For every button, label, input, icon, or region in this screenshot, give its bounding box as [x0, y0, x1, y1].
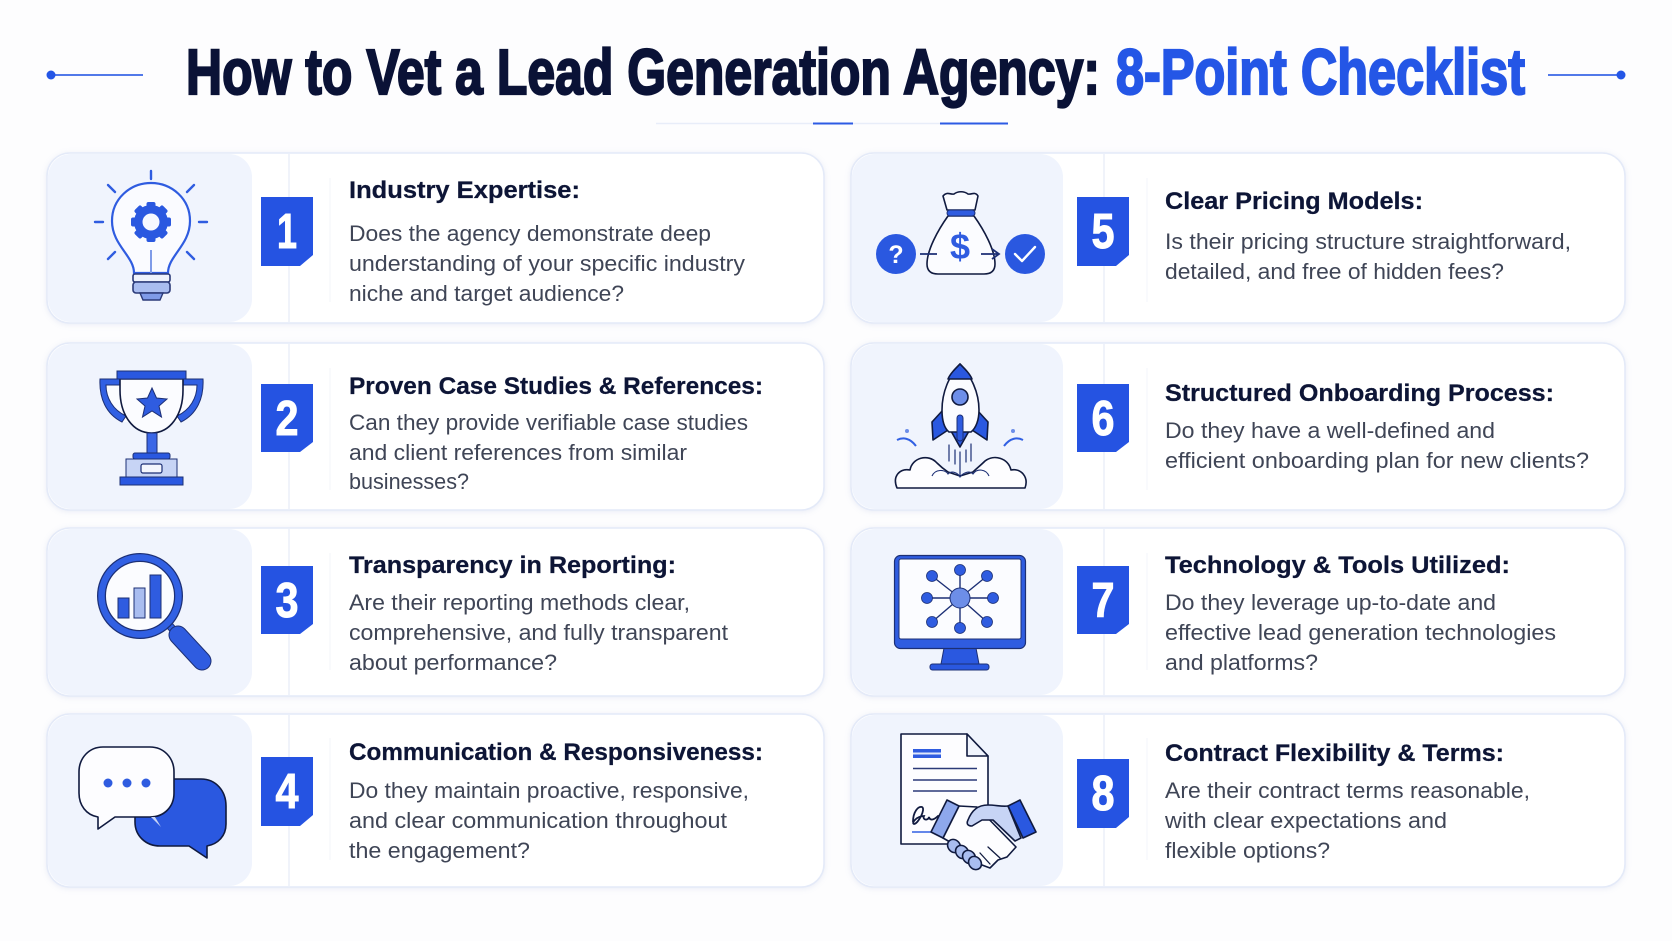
card 2: Proven Case Studies & References	[47, 343, 824, 510]
card 3 text: comprehensive, and fully transparent	[349, 620, 729, 645]
card 7 text	[1165, 552, 1556, 675]
number badge 4: 4	[276, 765, 298, 819]
card 6 text: efficient onboarding plan for new clients?	[1165, 448, 1589, 473]
header ornament: right line with dot	[1548, 70, 1626, 80]
card 3 text: Are their reporting methods clear,	[349, 590, 690, 615]
card 3 text: Transparency in Reporting:	[349, 552, 676, 579]
number badge 2: 2	[276, 392, 298, 446]
icon: money bag with question and check: $	[950, 226, 970, 267]
card 1 text: niche and target audience?	[349, 281, 624, 306]
number badge 7: 7	[1092, 574, 1114, 628]
header ornament: left line with dot	[46, 70, 143, 80]
card 5: Clear Pricing Models	[851, 153, 1625, 323]
card 4 text: Communication & Responsiveness:	[349, 739, 763, 766]
card 2 text: Can they provide verifiable case studies	[349, 410, 748, 435]
card 5 text: Clear Pricing Models:	[1165, 188, 1423, 215]
card 2 text: Proven Case Studies & References:	[349, 373, 763, 400]
card 2 text: and client references from similar	[349, 440, 688, 465]
title underline	[656, 122, 1008, 124]
number badge 6: 6	[1092, 392, 1114, 446]
icon: money bag with question and check: ?	[888, 241, 904, 269]
title: 8-Point Checklist	[1116, 36, 1525, 108]
card 7 text: Do they leverage up-to-date and	[1165, 590, 1496, 615]
number badge 1: 1	[277, 205, 297, 259]
card 6 text: Do they have a well-defined and	[1165, 418, 1495, 443]
icon: money bag with question and check	[876, 192, 1045, 274]
card 2 text	[349, 373, 763, 494]
card 4 text: and clear communication throughout	[349, 808, 728, 833]
card 7 text: effective lead generation technologies	[1165, 620, 1556, 645]
card 4 text: Do they maintain proactive, responsive,	[349, 778, 749, 803]
card 8 text: Contract Flexibility & Terms:	[1165, 740, 1504, 767]
card 8 text: Are their contract terms reasonable,	[1165, 778, 1530, 803]
icon: rocket launching from clouds	[895, 364, 1026, 488]
icon: chat bubbles	[79, 747, 226, 858]
card 6 text	[1165, 380, 1589, 473]
number badge 6	[1077, 384, 1129, 452]
card 8 text: flexible options?	[1165, 838, 1330, 863]
number badge 4	[261, 757, 313, 826]
number badge 8: 8	[1092, 767, 1114, 821]
card 7: Technology & Tools Utilized	[851, 528, 1625, 696]
number badge 7	[1077, 566, 1129, 634]
card 4 text: the engagement?	[349, 838, 530, 863]
number badge 3: 3	[276, 574, 298, 628]
card 5 text: Is their pricing structure straightforward,	[1165, 229, 1571, 254]
card 1 text: Does the agency demonstrate deep	[349, 221, 711, 246]
title: How to Vet a Lead Generation Agency:	[186, 36, 1100, 108]
card 4: Communication & Responsiveness	[47, 714, 824, 887]
card 8 text	[1164, 740, 1530, 863]
card 1 text: understanding of your specific industry	[349, 251, 746, 276]
card 7 text: Technology & Tools Utilized:	[1165, 552, 1510, 579]
icon: light bulb with gear	[95, 171, 207, 300]
card 3 text	[349, 552, 729, 675]
card 1 text: Industry Expertise:	[349, 177, 580, 204]
card 6 text: Structured Onboarding Process:	[1165, 380, 1554, 407]
card 1: Industry Expertise	[47, 153, 824, 323]
card 1 text	[349, 177, 746, 306]
card 3: Transparency in Reporting	[47, 528, 824, 696]
card 5 text: detailed, and free of hidden fees?	[1165, 259, 1504, 284]
card 2 text: businesses?	[349, 469, 469, 494]
card 8 text: with clear expectations and	[1164, 808, 1447, 833]
number badge 3	[261, 566, 313, 634]
card 3 text: about performance?	[349, 650, 557, 675]
icon: magnifying glass with bar chart	[102, 558, 202, 661]
icon: monitor with network hub	[894, 556, 1026, 670]
card 7 text: and platforms?	[1165, 650, 1318, 675]
number badge 5: 5	[1092, 205, 1114, 259]
number badge 8	[1077, 759, 1129, 828]
number badge 2	[261, 384, 313, 452]
card 4 text	[349, 739, 763, 863]
icon: trophy	[100, 371, 203, 485]
icon: contract and handshake	[901, 734, 1036, 872]
number badge 1	[261, 197, 313, 266]
card 6: Structured Onboarding Process	[851, 343, 1625, 510]
card 8: Contract Flexibility & Terms	[851, 714, 1625, 887]
number badge 5	[1077, 197, 1129, 266]
card 5 text	[1165, 188, 1571, 284]
